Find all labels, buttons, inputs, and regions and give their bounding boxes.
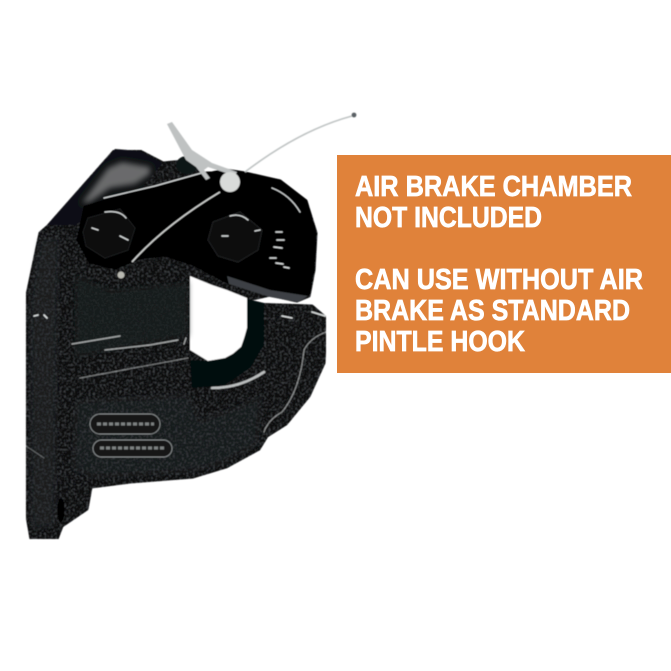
hook opening <box>190 276 247 361</box>
orange callout panel <box>337 155 671 373</box>
pintle hook product illustration <box>26 113 356 539</box>
lower wire <box>132 192 220 262</box>
lower body shading <box>72 394 262 478</box>
hook body casting <box>26 150 326 539</box>
callout text: air brake chamber not included: AIR BRAKE CHAMBER <box>355 171 632 203</box>
callout text: can use without air brake: PINTLE HOOK <box>355 326 525 358</box>
small pivot bolt <box>176 156 198 174</box>
cable tip <box>352 113 356 117</box>
casting highlights <box>26 172 326 458</box>
left bolt <box>83 209 135 258</box>
latch lever <box>78 170 315 300</box>
callout text: can use without air brake: BRAKE AS STANDARD <box>355 295 630 327</box>
silver pin head <box>220 172 240 192</box>
right bolt <box>208 212 262 262</box>
wedge highlight texture <box>82 162 150 203</box>
embossed plate lettering <box>97 424 166 448</box>
pull cable <box>245 116 352 172</box>
wedge plate <box>47 149 163 225</box>
lever underside highlight <box>227 276 308 302</box>
hook inner surface <box>190 299 264 388</box>
callout text: can use without air brake <box>355 264 643 358</box>
embossed logo plates <box>90 414 172 457</box>
callout text: air brake chamber not included: NOT INCLUDED <box>355 202 542 234</box>
panel background <box>337 155 671 373</box>
upper block <box>75 274 188 358</box>
callout text: air brake chamber not included <box>355 171 632 234</box>
silver latch pin <box>167 122 237 180</box>
wire clip <box>118 272 124 278</box>
mounting plate shading <box>30 236 60 530</box>
mounting hole <box>58 498 64 522</box>
